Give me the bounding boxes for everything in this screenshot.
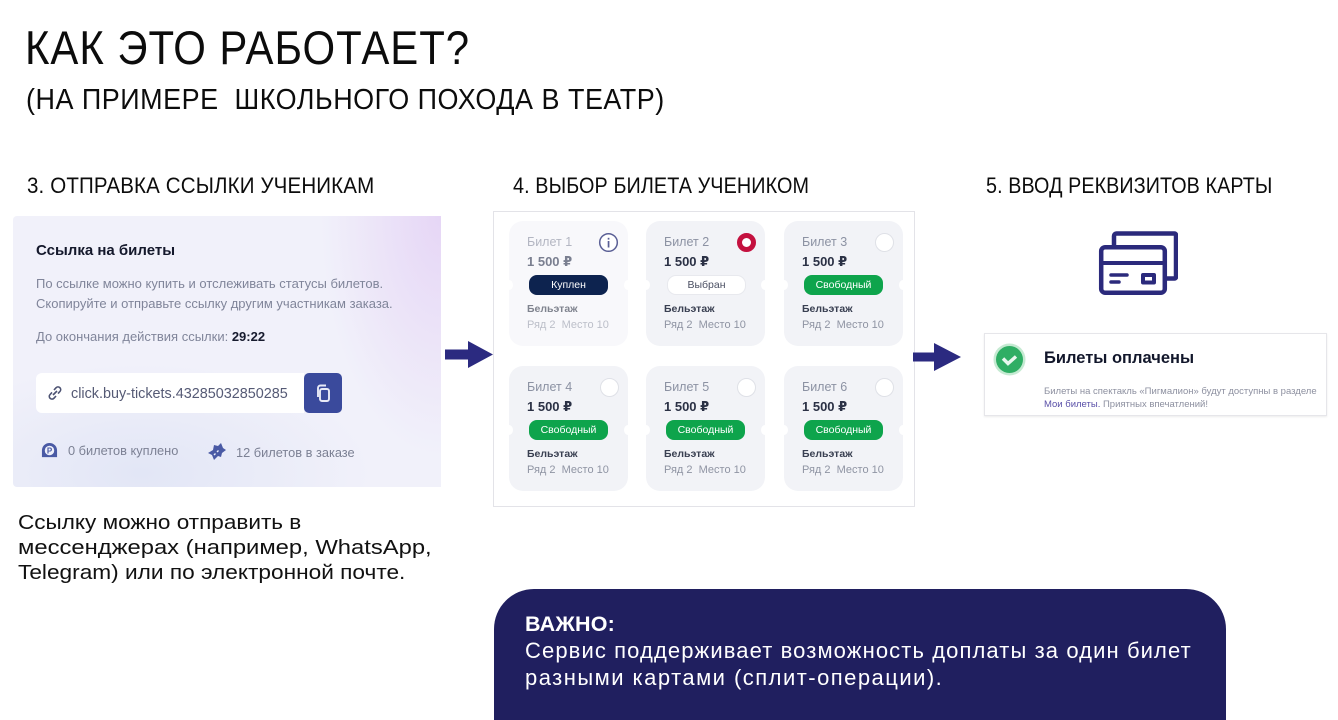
ticket 5: 1 500 ₽ <box>664 399 709 414</box>
status: bought: Куплен <box>551 279 586 291</box>
status: bought <box>529 275 608 295</box>
ticket 4: 1 500 ₽ <box>527 399 572 414</box>
paid heading: Билеты оплачены <box>1044 349 1194 367</box>
link field <box>36 373 304 413</box>
icon: info <box>598 233 618 252</box>
status: free: Свободный <box>816 424 871 436</box>
ticket 2: Бельэтаж <box>664 303 715 315</box>
title: КАК ЭТО РАБОТАЕТ? <box>25 21 470 74</box>
ticket 4: Бельэтаж <box>527 448 578 460</box>
ticket 4: Ряд 2 Место 10 <box>527 464 609 476</box>
copy button <box>304 373 342 413</box>
heading: step 4: 4. ВЫБОР БИЛЕТА УЧЕНИКОМ <box>513 173 809 198</box>
status: free <box>666 420 745 440</box>
panel: link to tickets <box>13 216 441 487</box>
ticket 5 <box>646 366 765 491</box>
icon: link <box>48 386 62 400</box>
arrow: step 3 to 4 <box>445 341 493 368</box>
ticket 3: Билет 3 <box>802 235 847 249</box>
ticket 2: 1 500 ₽ <box>664 254 709 269</box>
stat: tickets in order <box>208 443 355 460</box>
ticket 3 <box>784 221 903 346</box>
panel heading: Ссылка на билеты <box>36 242 175 259</box>
icon: ticket <box>208 443 226 460</box>
ticket 3: Ряд 2 Место 10 <box>802 319 884 331</box>
subtitle: (НА ПРИМЕРЕ ШКОЛЬНОГО ПОХОДА В ТЕАТР) <box>26 84 665 116</box>
ticket 2: Ряд 2 Место 10 <box>664 319 746 331</box>
status: free: Свободный <box>541 424 596 436</box>
callout text: Сервис поддерживает возможность доплаты за один билет <box>525 638 1192 663</box>
ticket 1: 1 500 ₽ <box>527 254 572 269</box>
ticket 1: Билет 1 <box>527 235 572 249</box>
caption under link panel: Telegram) или по электронной почте. <box>18 561 405 584</box>
panel: tickets paid <box>984 333 1327 416</box>
panel: ticket selection <box>493 211 915 507</box>
ticket 6: Билет 6 <box>802 380 847 394</box>
stat: tickets bought <box>42 443 178 458</box>
icon: radio <box>875 378 894 397</box>
ticket 3: 1 500 ₽ <box>802 254 847 269</box>
ticket 3: Бельэтаж <box>802 303 853 315</box>
ticket 2 <box>646 221 765 346</box>
status: free: Свободный <box>816 279 871 291</box>
callout text <box>525 638 1192 690</box>
ticket 4: Билет 4 <box>527 380 572 394</box>
heading: step 5: 5. ВВОД РЕКВИЗИТОВ КАРТЫ <box>986 173 1272 198</box>
stat label: 0 билетов куплено <box>68 443 178 458</box>
countdown: До окончания действия ссылки: 29:22 <box>36 329 265 344</box>
paid note: Мои билеты. Приятных впечатлений! <box>1044 399 1208 410</box>
caption under link panel: Ссылку можно отправить в <box>18 511 301 534</box>
arrow: step 4 to 5 <box>913 343 961 371</box>
status: free <box>804 275 883 295</box>
ticket 6: 1 500 ₽ <box>802 399 847 414</box>
link text: click.buy-tickets.43285032850285 <box>71 386 288 402</box>
icon: coin: Р <box>47 446 53 455</box>
status: selected <box>667 275 746 295</box>
callout: important <box>494 589 1226 720</box>
ticket 6 <box>784 366 903 491</box>
status: free <box>804 420 883 440</box>
status: free <box>529 420 608 440</box>
callout heading: ВАЖНО: <box>525 612 615 636</box>
ticket 1 <box>509 221 628 346</box>
status: free: Свободный <box>678 424 733 436</box>
paid note: Билеты на спектакль «Пигмалион» будут доступны в разделе <box>1044 386 1317 397</box>
icon: copy <box>317 384 330 402</box>
heading: step 3: 3. ОТПРАВКА ССЫЛКИ УЧЕНИКАМ <box>27 173 374 198</box>
ticket 5: Бельэтаж <box>664 448 715 460</box>
ticket 6: Бельэтаж <box>802 448 853 460</box>
ticket 5: Билет 5 <box>664 380 709 394</box>
icon: radio <box>600 378 619 397</box>
caption under link panel <box>18 511 432 584</box>
ticket 1: Ряд 2 Место 10 <box>527 319 609 331</box>
icon: bank cards <box>1098 231 1178 295</box>
panel description: Скопируйте и отправьте ссылку другим участникам заказа. <box>36 296 393 311</box>
paid note <box>1044 386 1317 410</box>
panel description <box>36 276 393 311</box>
callout text: разными картами (сплит-операции). <box>525 665 943 690</box>
icon: radio <box>737 378 756 397</box>
icon: radio <box>875 233 894 252</box>
status: selected: Выбран <box>687 279 726 291</box>
panel description: По ссылке можно купить и отслеживать статусы билетов. <box>36 276 383 291</box>
icon: coin <box>42 443 58 458</box>
ticket 4 <box>509 366 628 491</box>
ticket 5: Ряд 2 Место 10 <box>664 464 746 476</box>
ticket 2: Билет 2 <box>664 235 709 249</box>
stat label: 12 билетов в заказе <box>236 445 355 460</box>
icon: selected radio <box>737 233 756 252</box>
icon: success check <box>994 344 1026 376</box>
ticket 6: Ряд 2 Место 10 <box>802 464 884 476</box>
caption under link panel: мессенджерах (например, WhatsApp, <box>18 536 432 559</box>
ticket 1: Бельэтаж <box>527 303 578 315</box>
